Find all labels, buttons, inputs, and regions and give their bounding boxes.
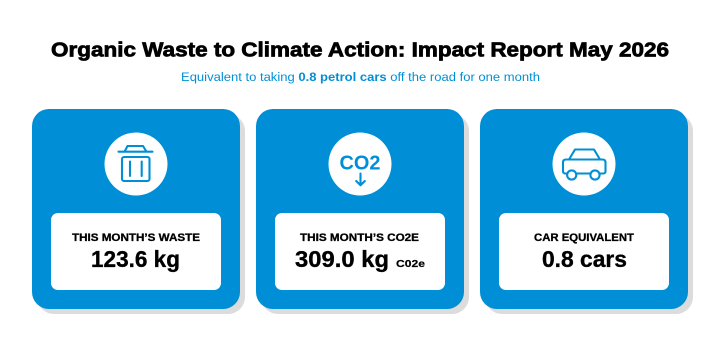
stat value: 123.6 kg [91,246,180,272]
stat value: 309.0 kg [295,246,389,272]
panel: car equivalent [480,109,693,314]
stat label: THIS MONTH’S CO2E [300,232,419,244]
stat box: this month's waste [51,213,221,290]
stat label: CAR EQUIVALENT [534,232,634,244]
card shadow [485,114,693,314]
card background [32,109,240,309]
icon: car [552,132,616,196]
panel: waste [32,109,245,314]
stat box: this month's co2e [275,213,445,290]
stat label: THIS MONTH’S WASTE [72,232,200,244]
card background [256,109,464,309]
stat box: car equivalent [499,213,669,290]
title: Organic Waste to Climate Action: Impact Report May 2026 [51,38,669,61]
card shadow [37,114,245,314]
icon: co2 down arrow: CO2 [340,152,380,174]
icon: trash bin [104,132,168,196]
subtitle: Equivalent to taking 0.8 petrol cars off the road for one month [181,70,540,84]
card shadow [261,114,469,314]
stat unit: C02e [396,258,425,270]
card background [480,109,688,309]
icon: co2 down arrow [328,132,392,196]
panel: co2e [256,109,469,314]
stat value: 0.8 cars [542,246,627,272]
